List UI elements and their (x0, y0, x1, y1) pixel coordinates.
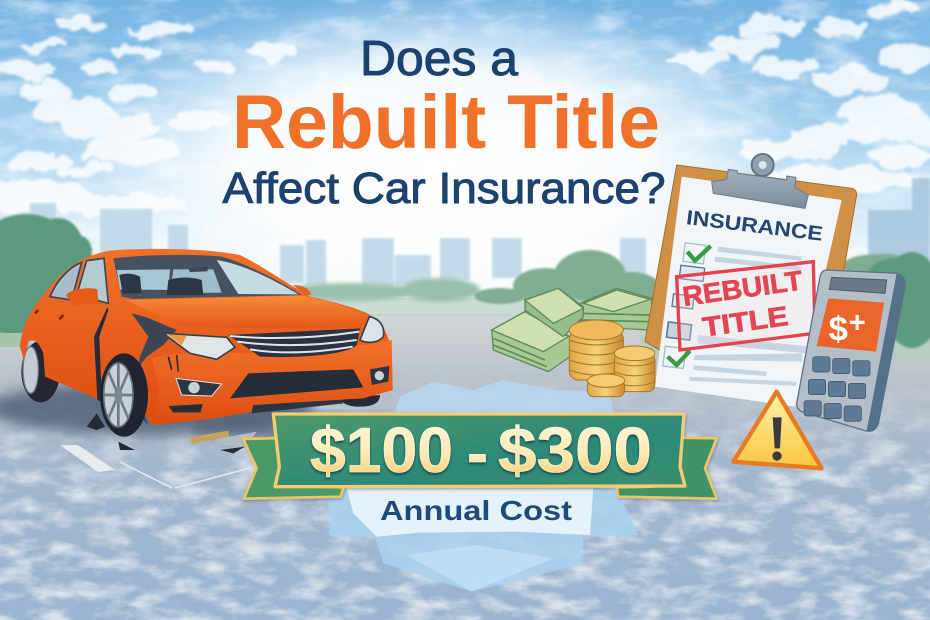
key symbol: $ (829, 311, 848, 349)
clipboard backing (645, 165, 857, 400)
illustration: money and coins (492, 288, 655, 397)
title line: Rebuilt Title: Rebuilt Title (232, 80, 660, 165)
fog lights (176, 366, 389, 396)
illustration: insurance clipboard (645, 154, 857, 407)
REBUILT TITLE stamp (677, 262, 815, 350)
front wheel (100, 353, 148, 437)
ribbon tail right (617, 437, 717, 499)
door gap (94, 307, 108, 402)
far tyre (340, 395, 380, 407)
icon: warning triangle (733, 392, 822, 468)
rear wheel (21, 341, 60, 402)
illustration: damaged orange car (20, 249, 393, 453)
green ribbon banner (243, 414, 717, 499)
under bumper shadow (252, 398, 343, 413)
side windows (50, 262, 82, 300)
side mirror (66, 288, 98, 305)
car body (20, 249, 393, 425)
windshield (113, 255, 302, 299)
title line: Does a: Does a (360, 32, 519, 86)
calculator body (797, 270, 905, 431)
paper sheet (655, 177, 842, 407)
price low: $100 (310, 414, 453, 486)
REBUILT TITLE stamp: TITLE (701, 300, 790, 343)
debris (87, 413, 257, 453)
lower air intake (230, 369, 363, 398)
background: cracked asphalt ground (0, 314, 930, 620)
headlight right (360, 317, 384, 342)
REBUILT TITLE stamp: REBUILT (681, 264, 805, 312)
key plus: + (849, 307, 866, 340)
price dash: - (467, 417, 488, 489)
light blue shard burst behind banner (328, 380, 638, 592)
banner caption: Annual Cost (380, 495, 572, 526)
background: distant city skyline (30, 178, 930, 286)
price high: $300 (498, 414, 652, 486)
hood (126, 296, 369, 328)
keypad (804, 357, 870, 421)
crash damage (132, 313, 177, 425)
ribbon main panel (273, 414, 685, 487)
INSURANCE heading: INSURANCE (685, 207, 824, 246)
front grille (228, 328, 360, 357)
headlight left (163, 333, 235, 359)
banner price (310, 414, 652, 489)
clip (712, 154, 808, 208)
background: tree lines (0, 214, 930, 362)
title (222, 32, 666, 213)
ribbon tail left (243, 437, 343, 499)
bumper damage marks (168, 355, 202, 412)
orange key (817, 298, 884, 352)
illustration: calculator (797, 270, 905, 431)
title line: Affect Car Insurance?: Affect Car Insurance? (222, 164, 666, 213)
checklist (663, 243, 810, 386)
coin stacks (569, 320, 655, 397)
background: sky (0, 0, 930, 345)
cash stacks (492, 288, 652, 372)
front bumper (152, 340, 393, 425)
calculator screen (829, 277, 887, 293)
far mirror (293, 285, 311, 295)
